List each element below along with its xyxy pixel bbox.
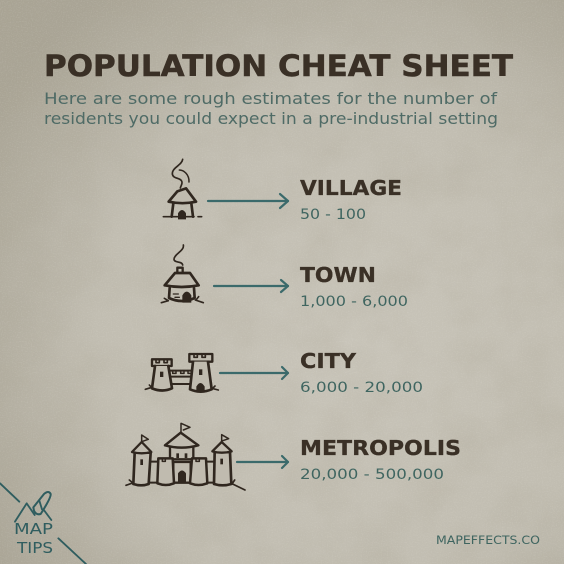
row: town: [161, 245, 408, 310]
logo mark: mountains and pen: [0, 483, 86, 564]
arrow: city: [220, 367, 288, 379]
subtitle: Here are some rough estimates for the number of: [44, 89, 497, 108]
arrow: metropolis: [237, 456, 288, 468]
label: village: VILLAGE: [300, 176, 402, 200]
logo text: TIPS: [16, 539, 53, 557]
label: village: [300, 176, 402, 223]
icon: village hut: [163, 159, 202, 219]
icon: metropolis castle: [126, 423, 245, 490]
logo text: MAP: [14, 520, 53, 538]
arrow: village: [208, 194, 288, 208]
icon: city castle: [145, 354, 218, 393]
label: town: 1,000 - 6,000: [300, 294, 408, 310]
icon: town house: [161, 245, 203, 303]
label: town: TOWN: [300, 263, 376, 287]
label: city: CITY: [300, 349, 357, 373]
label: village: 50 - 100: [300, 207, 366, 223]
subtitle: [44, 89, 498, 128]
website url: MAPEFFECTS.CO: [436, 533, 540, 547]
label: city: 6,000 - 20,000: [300, 380, 423, 396]
title: POPULATION CHEAT SHEET: [44, 49, 513, 83]
row: city: [145, 349, 423, 396]
label: town: [300, 263, 408, 310]
row: village: [163, 159, 402, 223]
row: metropolis: [126, 423, 461, 490]
label: metropolis: METROPOLIS: [300, 436, 461, 460]
label: metropolis: [300, 436, 461, 483]
logo text: [14, 520, 53, 557]
subtitle: residents you could expect in a pre-industrial setting: [44, 109, 498, 128]
logo: map tips: [0, 483, 86, 564]
label: city: [300, 349, 423, 396]
arrow: town: [214, 280, 288, 292]
label: metropolis: 20,000 - 500,000: [300, 467, 444, 483]
